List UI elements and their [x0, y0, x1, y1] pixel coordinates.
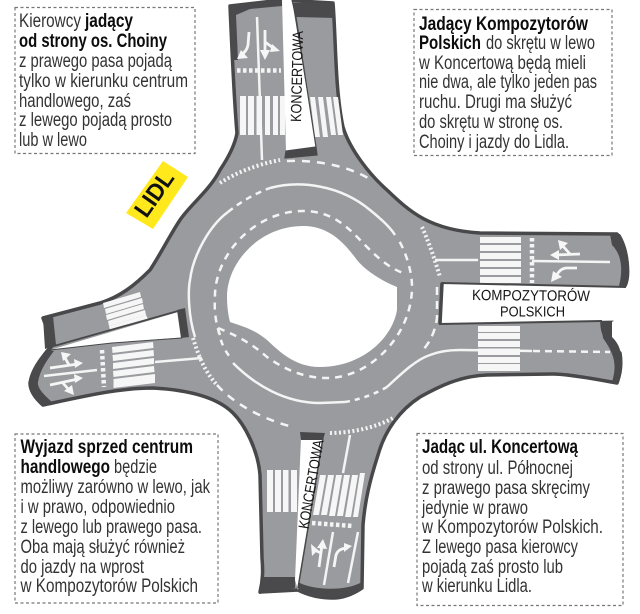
panel: from Koncertowa: z prawego pasa skręcimy: [422, 478, 590, 499]
icon: east left-turn arrow: [551, 268, 577, 282]
panel: Kompozytorów Polskich: [414, 10, 612, 156]
central island: [227, 226, 397, 367]
panel: Kompozytorów Polskich: do skrętu w stronę os.: [419, 112, 563, 133]
panel: exit from shopping centre: Oba mają służyć również: [20, 537, 185, 558]
panel: Kompozytorów Polskich: ruchu. Drugi ma służyć: [419, 92, 572, 113]
icon: south right-turn arrow: [334, 543, 352, 567]
panel: from Koncertowa: [417, 434, 623, 606]
panel: from Koncertowa: pojadą zaś prosto lub: [422, 557, 563, 578]
icon: west lower arrow: [50, 374, 83, 395]
traffic island: west wedge: [50, 308, 189, 350]
traffic island: Koncertowa north: [282, 0, 317, 158]
panel: exit from shopping centre: z lewego lub prawego pasa.: [20, 517, 202, 538]
panel: exit from shopping centre: w Kompozytorów Polskich: [20, 576, 198, 597]
pedestrian crossings: [103, 96, 521, 517]
icon: north left-turn arrow: [237, 32, 249, 59]
street label: Koncertowa north: KONCERTOWA: [288, 31, 307, 122]
panel: Kompozytorów Polskich: Polskich: [419, 33, 481, 54]
street label: Koncertowa south: KONCERTOWA: [296, 439, 328, 530]
panel: Kompozytorów Polskich: do skrętu w lewo: [486, 33, 595, 54]
panel: exit from shopping centre: handlowego: [20, 457, 110, 478]
panel: from Choiny: z lewego pojadą prosto: [19, 110, 172, 131]
panel: exit from shopping centre: Wyjazd sprzed centrum: [20, 437, 193, 458]
panel: from Choiny: tylko w kierunku centrum: [19, 71, 188, 92]
icon: north straight-right arrow: [260, 30, 280, 60]
panel: from Choiny: Kierowcy: [19, 11, 81, 32]
street label: Kompozytorów Polskich: [472, 287, 591, 320]
panel: Kompozytorów Polskich: Jadący Kompozytorów: [419, 14, 588, 35]
icon: south straight-left arrow: [311, 539, 327, 567]
panel: from Koncertowa: Z lewego pasa kierowcy: [422, 537, 578, 558]
panel: Kompozytorów Polskich: w Koncertową będą mieli: [418, 53, 586, 74]
panel: from Koncertowa: jedynie w prawo: [421, 498, 528, 519]
panel: exit from shopping centre: do jazdy na wprost: [20, 557, 145, 578]
icon: east straight-left arrow: [550, 240, 580, 260]
panel: exit from shopping centre: i w prawo, odpowiednio: [20, 497, 175, 518]
panel: from Choiny: z prawego pasa pojadą: [19, 51, 172, 72]
panel: from Choiny: jadący: [84, 11, 133, 32]
panel: from Koncertowa: w kierunku Lidla.: [421, 576, 532, 597]
yield teeth: [193, 160, 440, 433]
sign: Lidl: LIDL: [129, 166, 180, 222]
stop lines: [102, 70, 532, 526]
panel: from Choiny: handlowego, zaś: [19, 91, 131, 112]
icons: lane arrows: [50, 30, 580, 567]
panel: exit from shopping centre: będzie: [114, 457, 157, 478]
panel: Kompozytorów Polskich: Choiny i jazdy do Lidla.: [419, 132, 569, 153]
street label: Kompozytorów Polskich: KOMPOZYTORÓW: [472, 287, 591, 305]
panel: from Choiny: [15, 8, 195, 154]
panel: from Koncertowa: od strony ul. Północnej: [422, 458, 573, 479]
panel: exit from shopping centre: [15, 434, 218, 603]
panel: exit from shopping centre: możliwy zarówno w lewo, jak: [20, 477, 210, 498]
street label: Kompozytorów Polskich: POLSKICH: [500, 304, 565, 320]
traffic island: Koncertowa south: [295, 432, 325, 590]
panel: from Koncertowa: Jadąc ul. Koncertową: [422, 437, 578, 458]
panel: from Choiny: od strony os. Choiny: [19, 31, 167, 52]
icon: west upper arrow: [50, 352, 83, 368]
traffic island: Kompozytorów east: [440, 283, 640, 324]
panel: from Choiny: lub w lewo: [19, 130, 87, 151]
